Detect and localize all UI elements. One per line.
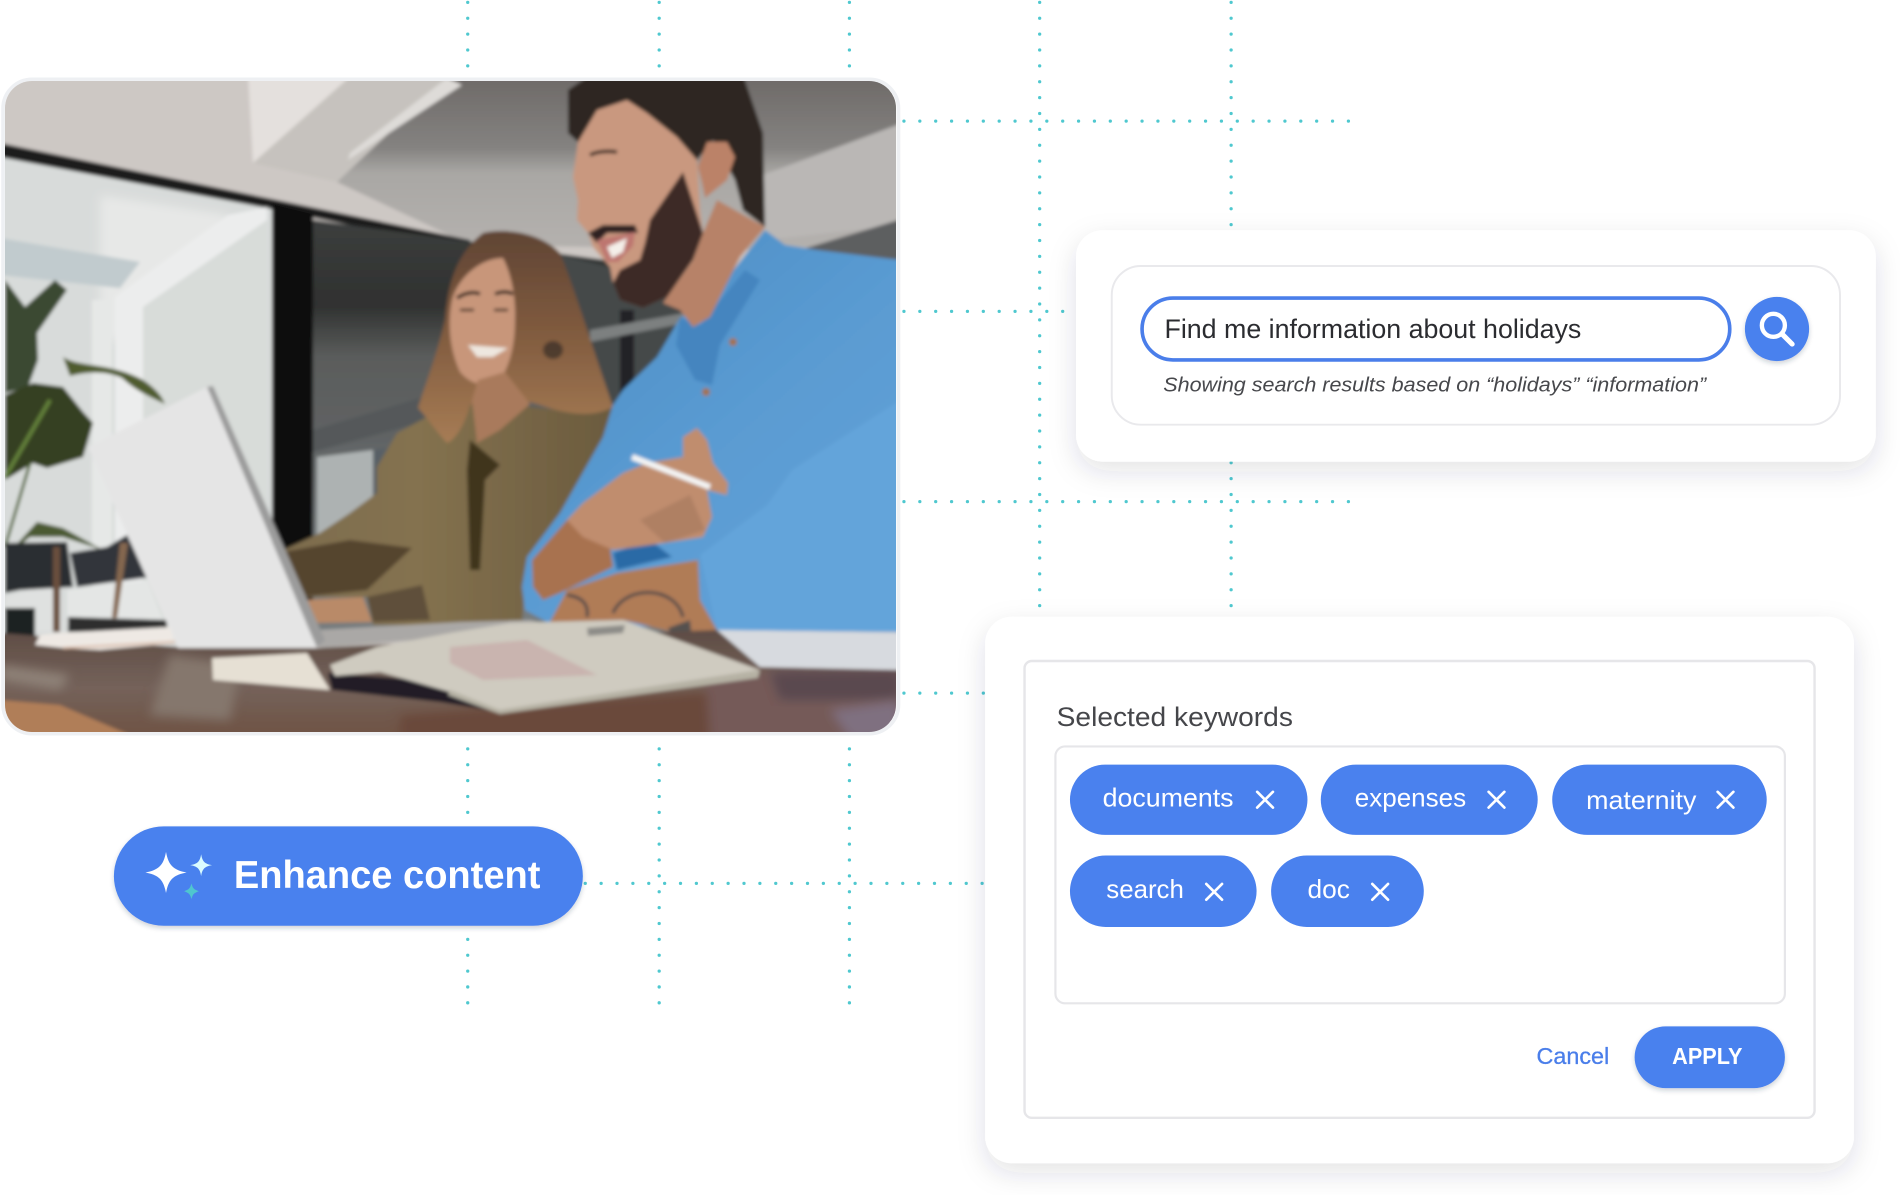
- plant: [5, 280, 165, 557]
- search hint text: Showing search results based on “holidays” “information”: [1163, 373, 1707, 396]
- apply button: APPLY: [1672, 1043, 1742, 1069]
- chip: documents: documents: [1103, 784, 1234, 812]
- apply button: [1635, 1026, 1785, 1088]
- photo: two colleagues at a laptop: [0, 75, 910, 740]
- chip: search: [1070, 855, 1257, 927]
- icon: sparkles: [145, 852, 212, 899]
- chairs: [5, 535, 167, 636]
- chip: documents: [1070, 765, 1307, 835]
- cancel link: Cancel: [1536, 1043, 1609, 1069]
- office background: [5, 81, 896, 649]
- keywords inner frame: [1025, 661, 1815, 1118]
- chip: search: search: [1106, 876, 1184, 904]
- button label: Enhance content: [234, 854, 541, 897]
- chip: expenses: [1321, 765, 1538, 835]
- keywords heading: Selected keywords: [1057, 702, 1293, 732]
- pill button: Enhance content: [114, 826, 583, 926]
- panel: selected keywords card: [985, 617, 1854, 1163]
- laptop: [132, 384, 536, 652]
- chip: maternity: maternity: [1586, 787, 1697, 815]
- dotted grid connectors: [468, 2, 1352, 1005]
- woman: [283, 231, 613, 625]
- search inner frame: [1112, 266, 1840, 425]
- chip: maternity: [1552, 765, 1767, 835]
- panel: search card: [1076, 230, 1876, 462]
- chip: doc: doc: [1307, 876, 1350, 904]
- search input: [1142, 298, 1730, 360]
- chip: doc: [1271, 855, 1424, 927]
- table: [0, 630, 900, 740]
- man: [522, 75, 900, 640]
- chip: expenses: expenses: [1355, 784, 1466, 812]
- keywords box: [1055, 746, 1785, 1003]
- notebooks and papers: [35, 620, 900, 714]
- icon: search button: [1745, 297, 1809, 361]
- search query text: Find me information about holidays: [1164, 314, 1581, 344]
